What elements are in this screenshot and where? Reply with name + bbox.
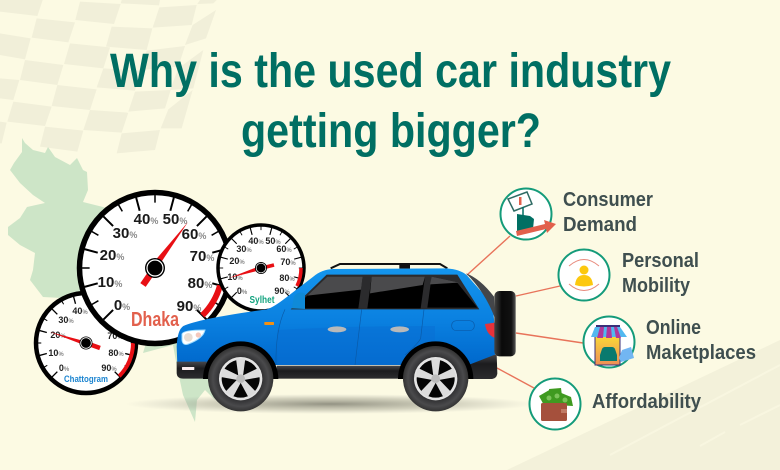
door lines (276, 309, 474, 365)
Sylhet label: Sylhet (250, 295, 275, 306)
Chattogram label: Chattogram (64, 374, 108, 385)
gauge: Sylhet: 0% (237, 286, 248, 296)
gauge: Dhaka: 60% (182, 226, 206, 243)
gauge: Chattogram: 70% (107, 331, 123, 341)
label: Demand (563, 214, 637, 236)
icon: wallet (530, 378, 580, 430)
map of Bangladesh (8, 138, 215, 422)
title: Why is the used car industry (110, 45, 671, 98)
front bumper (177, 362, 207, 379)
item: Online Maketplaces (584, 316, 756, 368)
gauge: Chattogram: 30% (58, 315, 74, 325)
gauge: Dhaka: 80% (188, 275, 212, 292)
Sylhet needle (229, 262, 274, 278)
side marker (264, 322, 274, 325)
label (622, 250, 699, 297)
background diagonal band (507, 340, 780, 470)
icon: personal mobility (558, 250, 610, 300)
Chattogram needle (50, 332, 100, 350)
label (646, 317, 756, 364)
spare tire (494, 291, 516, 356)
title (110, 45, 671, 158)
car shadow (125, 394, 535, 414)
gauge: Sylhet (218, 225, 304, 311)
door handles (328, 326, 409, 332)
roof rack (331, 263, 447, 269)
gauge: Dhaka: 20% (100, 247, 124, 264)
car body (177, 268, 495, 365)
gauge: Chattogram: 80% (108, 348, 124, 358)
rear wheel (403, 346, 468, 411)
label: Online (646, 317, 701, 339)
gauge: Sylhet: 40% (248, 236, 264, 246)
gauge: Dhaka: 90% (177, 298, 201, 315)
tail light (485, 323, 495, 338)
item: Personal Mobility (558, 250, 699, 300)
gauge: Chattogram: 20% (50, 330, 66, 340)
gauge: Sylhet: 60% (276, 244, 292, 254)
gauge: Chattogram: 90% (101, 363, 117, 373)
icon: consumer demand (500, 188, 556, 240)
title: getting bigger? (241, 105, 541, 158)
gauge: Dhaka: 30% (113, 225, 137, 242)
gauge: Dhaka: 50% (163, 211, 187, 228)
label (563, 189, 653, 236)
label: Consumer (563, 189, 653, 211)
Dhaka label: Dhaka (131, 309, 180, 331)
gauge: Chattogram: 0% (59, 363, 70, 373)
window frame (291, 275, 479, 309)
gauge: Sylhet: 90% (274, 286, 290, 296)
gauge: Chattogram: 10% (48, 348, 64, 358)
gauge: Chattogram: 40% (72, 306, 88, 316)
gauge: Dhaka: 0% (114, 297, 130, 314)
mirror (292, 293, 305, 309)
bumper lamp (182, 367, 194, 370)
rear pillar (466, 273, 495, 318)
label: Affordability (592, 391, 702, 413)
gauge: Sylhet: 20% (229, 256, 245, 266)
gauge: Sylhet: 70% (280, 257, 296, 267)
label: Personal (622, 250, 699, 272)
gauge: Sylhet: 50% (265, 236, 281, 246)
rear bumper (470, 354, 497, 379)
lower panel shade (277, 326, 435, 365)
headlight (182, 330, 205, 344)
gauge: Sylhet: 10% (227, 272, 243, 282)
gauge: Dhaka (80, 192, 230, 344)
sill (277, 366, 402, 379)
item: Affordability (530, 378, 702, 430)
gauge: Dhaka: 10% (98, 274, 122, 291)
gauge: Sylhet: 30% (236, 244, 252, 254)
front wheel (208, 346, 273, 411)
connector lines (467, 236, 583, 388)
gauge: Dhaka: 70% (190, 248, 214, 265)
checkered flag (0, 0, 217, 153)
wheel arches (203, 341, 473, 379)
icon: online marketplaces (584, 316, 634, 368)
label: Mobility (622, 275, 691, 297)
item: Consumer Demand (500, 188, 653, 240)
windows (294, 277, 477, 308)
label: Maketplaces (646, 342, 756, 364)
car (177, 263, 516, 411)
gauge: Dhaka: 40% (134, 211, 158, 228)
gauge: Sylhet: 80% (279, 273, 295, 283)
gauge: Chattogram (36, 293, 136, 393)
Dhaka needle (143, 222, 188, 285)
